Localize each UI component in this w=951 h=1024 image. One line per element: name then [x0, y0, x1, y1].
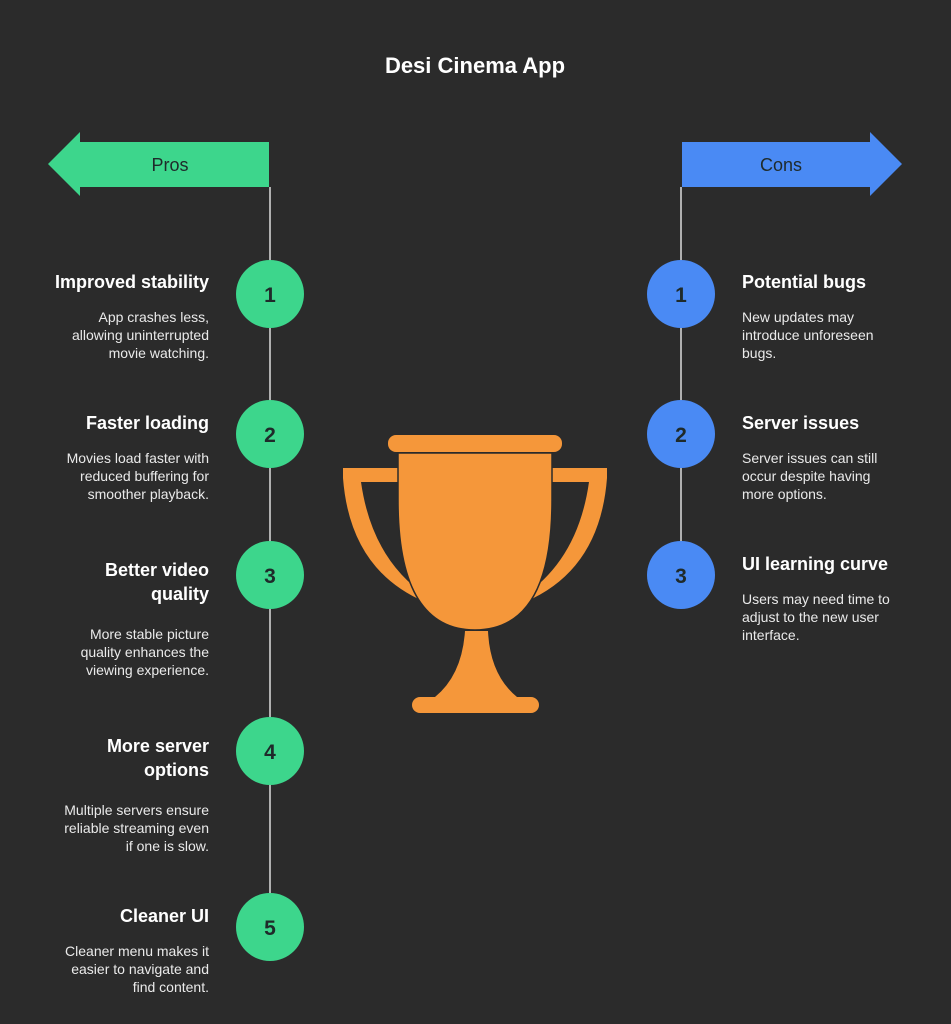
pros item 3: quality enhances the [81, 644, 209, 660]
pros item 3: Better video [105, 560, 209, 580]
pros item 3: viewing experience. [86, 662, 209, 678]
cons item 2: Server issues can still [742, 450, 877, 466]
pros item 4 [64, 717, 304, 854]
cons item 1: New updates may [742, 309, 854, 325]
pros item 4: reliable streaming even [64, 820, 209, 836]
pros item 3: 3 [264, 565, 276, 588]
pros item 2 [67, 400, 304, 502]
pros item 5: easier to navigate and [71, 961, 209, 977]
pros item 3: quality [151, 584, 209, 604]
pros item 1 [55, 260, 304, 361]
pros item 2: reduced buffering for [80, 468, 209, 484]
cons item 1 [647, 260, 874, 361]
pros item 5: Cleaner menu makes it [65, 943, 209, 959]
cons item 3: interface. [742, 627, 800, 643]
cons item 3 [647, 541, 890, 643]
pros item 2: Movies load faster with [67, 450, 209, 466]
pros item 3 [81, 541, 304, 678]
arrow: pros [48, 132, 269, 196]
pros item 2: 2 [264, 424, 276, 447]
arrow: cons [682, 132, 902, 196]
title: Desi Cinema App [385, 53, 565, 78]
cons item 3: Users may need time to [742, 591, 890, 607]
pros item 5: 5 [264, 917, 276, 940]
pros item 3: More stable picture [90, 626, 209, 642]
pros item 5: find content. [133, 979, 209, 995]
cons item 2: 2 [675, 424, 687, 447]
pros item 1: App crashes less, [98, 309, 209, 325]
cons item 1: introduce unforeseen [742, 327, 874, 343]
cons item 2: occur despite having [742, 468, 870, 484]
pros item 4: 4 [264, 741, 276, 764]
cons item 1: bugs. [742, 345, 776, 361]
arrow: cons: Cons [760, 155, 802, 175]
pros item 5: Cleaner UI [120, 906, 209, 926]
cons item 3: adjust to the new user [742, 609, 879, 625]
cons item 2 [647, 400, 877, 502]
pros item 4: More server [107, 736, 209, 756]
pros item 4: options [144, 760, 209, 780]
icon: trophy [343, 435, 607, 713]
cons item 1: Potential bugs [742, 272, 866, 292]
pros item 2: smoother playback. [88, 486, 209, 502]
pros item 1: allowing uninterrupted [72, 327, 209, 343]
cons item 2: Server issues [742, 413, 859, 433]
cons item 1: 1 [675, 284, 687, 307]
pros item 1: 1 [264, 284, 276, 307]
pros item 4: Multiple servers ensure [64, 802, 209, 818]
cons item 3: 3 [675, 565, 687, 588]
pros item 5 [65, 893, 304, 995]
pros item 1: Improved stability [55, 272, 209, 292]
cons item 2: more options. [742, 486, 827, 502]
pros item 2: Faster loading [86, 413, 209, 433]
cons item 3: UI learning curve [742, 554, 888, 574]
arrow: pros: Pros [151, 155, 189, 175]
pros item 4: if one is slow. [126, 838, 209, 854]
pros item 1: movie watching. [109, 345, 209, 361]
